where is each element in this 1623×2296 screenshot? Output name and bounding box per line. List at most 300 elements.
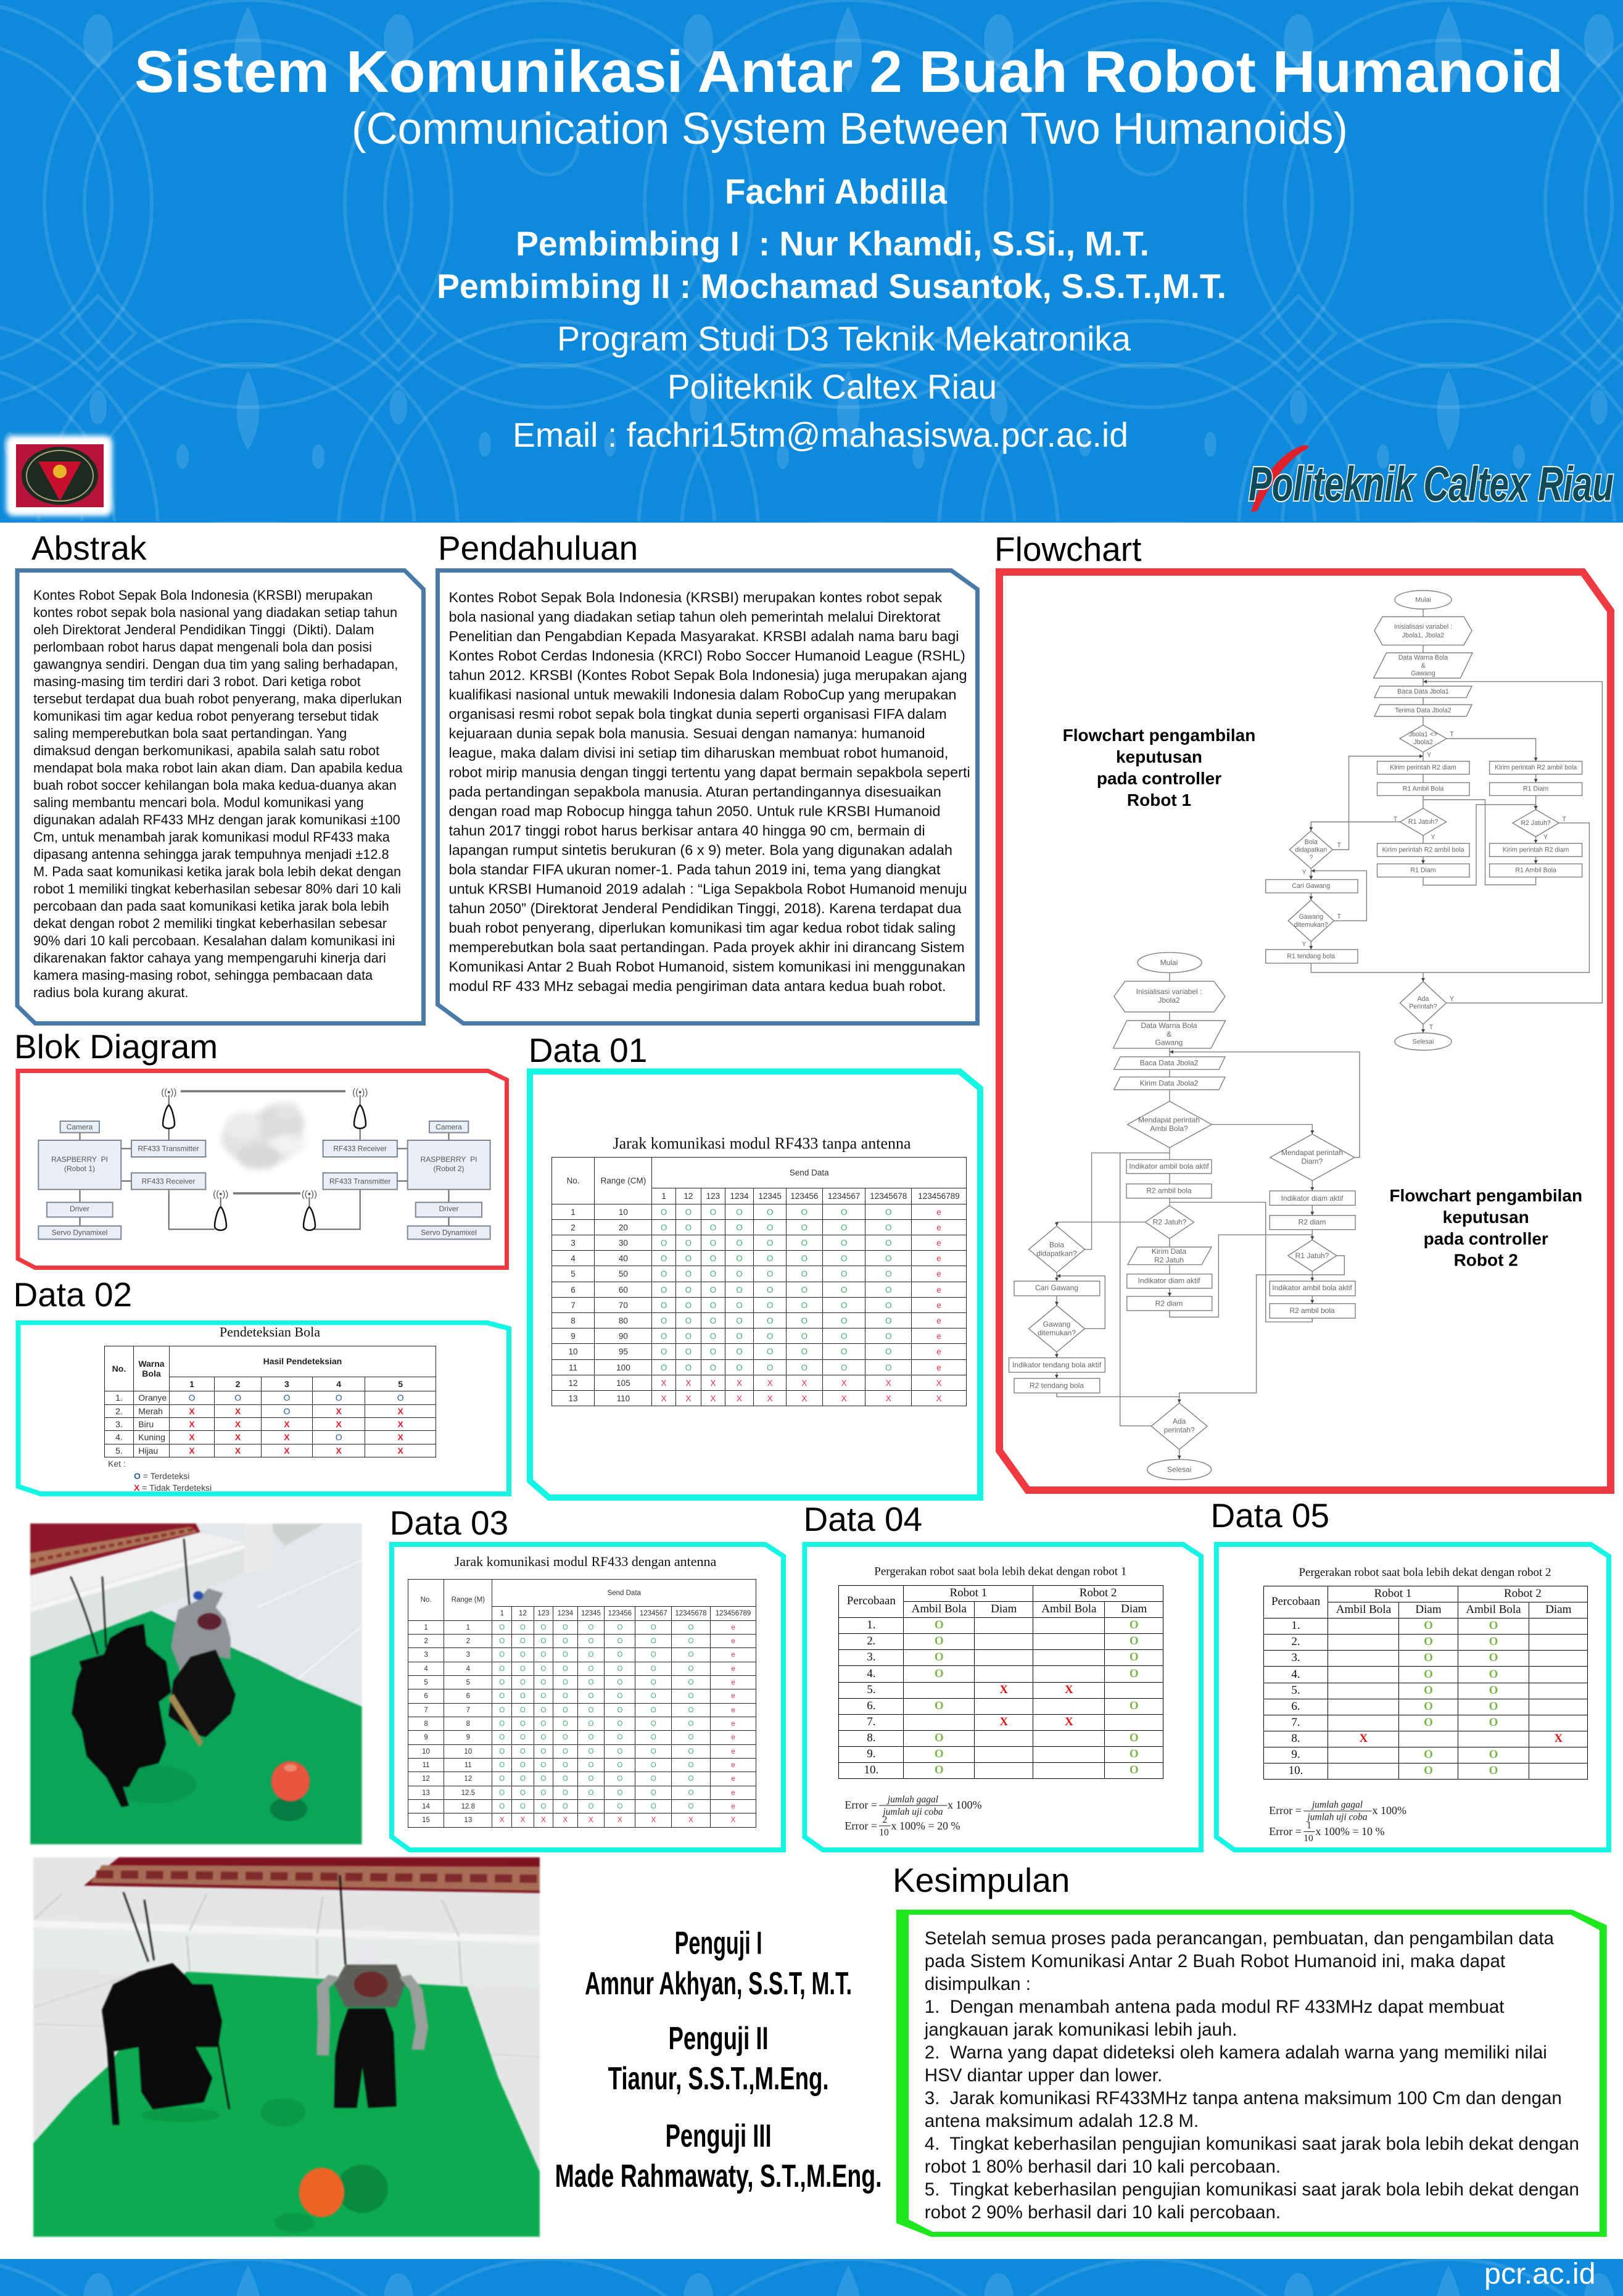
table: robot movement, ball closer to robot 1: O: [1129, 1747, 1139, 1760]
flowchart: Robot 2 decision: Baca Data Jbola2: [1140, 1058, 1199, 1067]
panel: Data 04: [802, 1542, 1204, 1852]
table: range with antenna: O: [499, 1720, 505, 1728]
table: range without antenna: O: [767, 1316, 773, 1325]
abstract text: perlombaan robot harus dapat mengenali bola dan posisi: [33, 639, 372, 655]
table: range without antenna: O: [661, 1207, 667, 1217]
flowchart: Robot 2 decision: Indikator diam aktif: [1138, 1277, 1200, 1285]
table: range without antenna: 105: [616, 1378, 630, 1387]
table: range without antenna: 3: [571, 1238, 576, 1248]
table: range with antenna: O: [588, 1679, 593, 1686]
error formula: [1269, 1799, 1406, 1844]
flowchart: Robot 1 decision: Y: [1302, 869, 1307, 876]
table: robot movement, ball closer to robot 1: 5.: [867, 1683, 875, 1696]
table: range without antenna: O: [685, 1285, 692, 1295]
flowchart: Robot 2 decision: R1 Jatuh?: [1295, 1251, 1329, 1260]
affiliation and email: [513, 319, 1131, 454]
table: ball detection: 3.: [115, 1419, 123, 1429]
examiners: Penguji III: [666, 2118, 772, 2154]
heading: Kesimpulan: Kesimpulan: [893, 1861, 1070, 1899]
error formula: jumlah gagal: [886, 1794, 938, 1805]
table: range with antenna: e: [731, 1748, 735, 1755]
table: range with antenna: e: [731, 1803, 735, 1810]
table: range with antenna: O: [651, 1679, 656, 1686]
table: range with antenna: O: [499, 1803, 505, 1810]
abstract text: Kontes Robot Sepak Bola Indonesia (KRSBI) merupakan: [33, 587, 373, 603]
flowchart: Robot 1 decision: R1 Ambil Bola: [1403, 785, 1443, 792]
footer banner: [0, 2259, 1623, 2296]
table: range with antenna: O: [540, 1789, 546, 1797]
abstract text: dekat dengan robot 2 memiliki tingkat keberhasilan sebesar: [33, 916, 387, 931]
table: range without antenna: O: [710, 1238, 716, 1248]
table: range with antenna: X: [521, 1817, 525, 1824]
flowchart: Robot 1 decision: T: [1337, 842, 1341, 849]
table: range without antenna: 6: [571, 1285, 576, 1295]
table: range without antenna: O: [685, 1362, 692, 1372]
flowchart: Robot 1 decision: Y: [1427, 752, 1431, 759]
heading: Data 04: Data 04: [803, 1500, 922, 1538]
table: range with antenna: O: [651, 1789, 656, 1797]
flowchart: Robot 2 decision: R2 diam: [1299, 1218, 1326, 1227]
abstract text: dipasang antenna sehingga jarak tempuhnya menjadi ±12.8: [33, 847, 389, 862]
title: Sistem Komunikasi Antar 2 Buah Robot Humanoid: [134, 39, 1563, 105]
table: range with antenna: X: [500, 1817, 505, 1824]
table: range with antenna: X: [617, 1817, 622, 1824]
table: range with antenna: 12345678: [675, 1610, 707, 1617]
table: range with antenna: O: [499, 1707, 505, 1714]
table: range without antenna: X: [737, 1393, 742, 1403]
table: robot movement, ball closer to robot 2: O: [1489, 1668, 1498, 1681]
table: ball detection: X: [284, 1432, 290, 1442]
table: range with antenna: O: [540, 1679, 546, 1686]
flowchart: Robot 1 decision: R1 Jatuh?: [1408, 818, 1438, 826]
affiliation and email: Politeknik Caltex Riau: [667, 367, 997, 406]
table: ball detection: O: [397, 1393, 404, 1403]
table: range with antenna: O: [520, 1651, 526, 1659]
abstract text: komunikasi tim agar kedua robot penyerang tersebut tidak: [33, 708, 379, 724]
table: range with antenna: O: [520, 1638, 526, 1645]
flowchart: Robot 2 decision: R2 ambil bola: [1289, 1306, 1335, 1315]
table: range without antenna: 8: [571, 1316, 576, 1325]
antenna wave symbols: ((•)): [213, 1189, 228, 1200]
abstract text: kamera masing-masing robot, sehingga pembacaan data: [33, 968, 373, 983]
table: range with antenna: O: [617, 1651, 622, 1659]
table: robot movement, ball closer to robot 1: O: [1129, 1699, 1139, 1712]
table: robot movement, ball closer to robot 1: Percobaan: [847, 1594, 896, 1607]
examiners: [555, 1925, 882, 2194]
table: range with antenna: O: [520, 1693, 526, 1700]
table: range without antenna: O: [710, 1347, 716, 1356]
table: range with antenna: 4: [466, 1665, 470, 1673]
caption: Robot 2 flowchart: keputusan: [1443, 1208, 1529, 1227]
table: range without antenna: O: [841, 1316, 847, 1325]
table: range with antenna: 6: [424, 1693, 428, 1700]
table: range with antenna: e: [731, 1762, 735, 1769]
introduction text: memperebutkan bola saat pertandingan. Pada proyek akhir ini dirancang Sistem: [449, 939, 965, 955]
table: range without antenna: O: [685, 1301, 692, 1309]
table: robot movement, ball closer to robot 1: Robot 2: [1080, 1586, 1117, 1599]
flowchart: Robot 2 decision: Indikator tendang bola aktif: [1012, 1361, 1102, 1369]
table: range without antenna: O: [767, 1269, 773, 1279]
table: range without antenna: 12: [683, 1192, 693, 1201]
introduction text: tahun 2017 tinggi robot harus berkisar antara 40 hingga 90 cm, bermain di: [449, 823, 925, 839]
table: range with antenna: O: [563, 1624, 568, 1631]
flowchart: Robot 1 decision: Y: [1431, 834, 1435, 841]
flowchart: Robot 1 decision: Bola: [1305, 839, 1318, 846]
flowchart: Robot 1 decision: T: [1394, 816, 1398, 823]
flowchart: Robot 1 decision: didapatkan: [1295, 847, 1327, 854]
table: range with antenna: 12.8: [461, 1803, 475, 1810]
table: range without antenna: O: [661, 1301, 667, 1309]
table: range with antenna: O: [617, 1638, 622, 1645]
table: range without antenna: O: [661, 1269, 667, 1279]
table: range without antenna: O: [801, 1316, 807, 1325]
table: ball detection: 4.: [115, 1432, 123, 1442]
table: range without antenna: X: [661, 1378, 667, 1387]
table: robot movement, ball closer to robot 2: 4.: [1291, 1668, 1300, 1681]
table: range without antenna: 123: [706, 1192, 720, 1201]
table: range without antenna: O: [841, 1207, 847, 1217]
table: range with antenna: O: [563, 1679, 568, 1686]
table: range without antenna: O: [841, 1332, 847, 1340]
table: range with antenna: O: [520, 1679, 526, 1686]
table: range without antenna: O: [710, 1285, 716, 1295]
table: range without antenna: 123456: [790, 1192, 818, 1201]
table: range without antenna: O: [661, 1362, 667, 1372]
table: range with antenna: O: [688, 1651, 693, 1659]
table: robot movement, ball closer to robot 2: 3.: [1291, 1651, 1300, 1664]
table: range with antenna: O: [617, 1679, 622, 1686]
table: robot movement, ball closer to robot 1: O: [1129, 1635, 1139, 1647]
table: range with antenna: O: [617, 1624, 622, 1631]
conclusion text: robot 1 80% berhasil dari 10 kali percobaan.: [925, 2157, 1281, 2177]
caption: Robot 1 flowchart: keputusan: [1116, 747, 1202, 766]
table: robot movement, ball closer to robot 2: O: [1424, 1635, 1433, 1648]
block diagram connectors: [80, 1095, 449, 1229]
table: range without antenna: X: [936, 1393, 942, 1403]
antenna wave symbols: ((•)): [302, 1189, 317, 1200]
table: range without antenna: O: [736, 1254, 743, 1262]
table: ball detection: X: [189, 1446, 195, 1456]
flowchart: Robot 2 decision: Ada: [1173, 1417, 1186, 1426]
Robot 2 blocks: RF433 Transmitter: [329, 1177, 390, 1186]
table: range without antenna: e: [936, 1207, 941, 1217]
Robot 2 blocks: [323, 1121, 490, 1239]
Robot 1 blocks: Driver: [70, 1204, 89, 1213]
table: range with antenna: O: [617, 1693, 622, 1700]
table: range with antenna: O: [499, 1638, 505, 1645]
table: range without antenna: X: [767, 1378, 773, 1387]
table: range with antenna: O: [563, 1638, 568, 1645]
error formula: 1: [1307, 1820, 1311, 1831]
table: range without antenna: O: [767, 1347, 773, 1356]
table: range without antenna: O: [736, 1316, 743, 1325]
table: range without antenna: O: [685, 1254, 692, 1262]
table: range with antenna: 9: [424, 1734, 428, 1741]
Robot 1 blocks: Servo Dynamixel: [52, 1228, 107, 1237]
table: range without antenna: O: [801, 1269, 807, 1279]
abstract text: 90% dari 10 kali percobaan. Kesalahan dalam komunikasi ini: [33, 933, 395, 948]
flowchart: Robot 1 decision: Gawang: [1411, 670, 1435, 678]
table: robot movement, ball closer to robot 2: [1263, 1586, 1588, 1780]
flowchart: Robot 1 decision: Data Warna Bola: [1398, 654, 1448, 661]
table: robot movement, ball closer to robot 2: O: [1424, 1684, 1433, 1697]
table: range without antenna: 9: [571, 1332, 576, 1340]
table: range without antenna: X: [661, 1393, 667, 1403]
table: range with antenna: 10: [464, 1748, 472, 1755]
table: ball detection: Biru: [138, 1419, 154, 1429]
table: robot movement, ball closer to robot 1: 1.: [867, 1618, 875, 1631]
table: range without antenna: O: [736, 1347, 743, 1356]
table: robot movement, ball closer to robot 2: O: [1424, 1619, 1433, 1632]
table: robot movement, ball closer to robot 2: 2.: [1291, 1635, 1300, 1648]
flowchart: Robot 2 decision: Indikator ambil bola aktif: [1272, 1283, 1352, 1292]
table: robot movement, ball closer to robot 1: Diam: [1121, 1602, 1147, 1615]
abstract text: buah robot soccer kehilangan bola maka kedua-duanya akan: [33, 777, 397, 793]
flowchart: Robot 2 decision: R2 diam: [1155, 1299, 1183, 1308]
table: robot movement, ball closer to robot 1: X: [1065, 1683, 1073, 1696]
table: ball detection: Oranye: [138, 1393, 167, 1403]
table: range with antenna: O: [540, 1734, 546, 1741]
table: range with antenna: 6: [466, 1693, 470, 1700]
supervisors: [437, 224, 1226, 305]
table: ball detection: Hasil Pendeteksian: [263, 1356, 342, 1366]
table: range with antenna: O: [588, 1803, 593, 1810]
flowchart: Robot 2 decision: Diam?: [1302, 1157, 1323, 1166]
table: range without antenna: 11: [569, 1362, 577, 1372]
flowchart: Robot 1 decision: T: [1429, 1024, 1434, 1031]
flowchart: Robot 1 decision: Jbola1 <>: [1409, 731, 1437, 738]
table: range with antenna: O: [520, 1734, 526, 1741]
flowchart: Robot 1 decision: Gawang: [1299, 913, 1323, 921]
error formula: Error =: [1269, 1825, 1302, 1838]
table: range without antenna: O: [736, 1269, 743, 1279]
abstract text: dikarenakan faktor cahaya yang mempengaruhi kinerja dari: [33, 950, 386, 966]
table: ball detection: X: [235, 1419, 241, 1429]
table: range with antenna: O: [520, 1803, 526, 1810]
table: range with antenna: O: [688, 1775, 693, 1783]
table: robot movement, ball closer to robot 2: O: [1424, 1700, 1433, 1713]
heading: Blok Diagram: Blok Diagram: [14, 1027, 218, 1066]
flowchart: Robot 2 decision: Mulai: [1160, 958, 1178, 967]
error formula: jumlah gagal: [1311, 1799, 1363, 1810]
conclusion text: 2. Warna yang dapat dideteksi oleh kamera adalah warna yang memiliki nilai: [925, 2042, 1547, 2063]
table: robot movement, ball closer to robot 1: O: [1129, 1651, 1139, 1664]
abstract text: masing-masing tim terdiri dari 3 robot. Dari ketiga robot: [33, 674, 361, 689]
table: ball detection: Kuning: [138, 1432, 165, 1442]
introduction text: untuk KRSBI Humanoid 2019 adalah : “Liga Sepakbola Robot Humanoid menuju: [449, 881, 967, 897]
table: range without antenna: 40: [619, 1254, 628, 1262]
panel: Abstrak: [15, 568, 426, 1026]
Robot 2 blocks: (Robot 2): [433, 1164, 465, 1173]
table: range with antenna: O: [540, 1693, 546, 1700]
table: ball detection: X: [235, 1446, 241, 1456]
table: robot movement, ball closer to robot 2: Ambil Bola: [1336, 1603, 1391, 1616]
table: range with antenna: No.: [421, 1596, 431, 1604]
table: range without antenna: O: [661, 1316, 667, 1325]
caption: Robot 1 flowchart: Robot 1: [1127, 790, 1191, 810]
table: range with antenna: O: [651, 1803, 656, 1810]
conclusion text: 1. Dengan menambah antena pada modul RF 433MHz dapat membuat: [925, 1997, 1504, 2017]
introduction text: dengan road map Robocup hingga tahun 2050. Untuk rule KRSBI Humanoid: [449, 803, 940, 819]
table: range with antenna: 13: [464, 1817, 472, 1824]
conclusion text: jangkauan jarak komunikasi lebih jauh.: [924, 2020, 1237, 2040]
introduction text: league, maka dalam divisi ini setiap tim diharuskan membuat robot humanoid,: [449, 745, 948, 761]
table: range without antenna: O: [885, 1223, 892, 1232]
table: range with antenna: O: [499, 1762, 505, 1769]
conclusion text: robot 2 90% berhasil dari 10 kali percobaan.: [925, 2202, 1281, 2223]
table title: Pendeteksian Bola: [220, 1324, 320, 1340]
table: range with antenna: O: [563, 1803, 568, 1810]
abstract text: oleh Direktorat Jenderal Pendidikan Tinggi (Dikti). Dalam: [33, 622, 374, 637]
table: range without antenna: O: [801, 1207, 807, 1217]
table: robot movement, ball closer to robot 1: 2.: [867, 1635, 875, 1647]
table: range with antenna: 11: [465, 1762, 472, 1769]
flowchart: Robot 2 decision: Ambi Bola?: [1150, 1124, 1188, 1133]
table: robot movement, ball closer to robot 2: Robot 1: [1374, 1587, 1411, 1600]
table: range without antenna: 1234567: [828, 1192, 860, 1201]
table: range with antenna: O: [588, 1651, 593, 1659]
table: range without antenna: 12: [568, 1378, 577, 1387]
error formula: jumlah uji coba: [1306, 1812, 1368, 1823]
table: range with antenna: e: [731, 1651, 735, 1659]
table: range without antenna: Send Data: [790, 1168, 829, 1177]
heading: Data 03: Data 03: [390, 1504, 508, 1542]
table: ball detection: X: [398, 1432, 403, 1442]
antennas: [163, 1105, 366, 1230]
table: range with antenna: 1: [500, 1610, 504, 1617]
table: range without antenna: e: [936, 1332, 941, 1340]
table: range without antenna: O: [661, 1332, 667, 1340]
table: range with antenna: O: [520, 1720, 526, 1728]
table: range with antenna: 9: [466, 1734, 470, 1741]
table: robot movement, ball closer to robot 1: 6.: [867, 1699, 875, 1712]
table: range with antenna: O: [688, 1734, 693, 1741]
flowchart: Robot 1 decision: R1 Ambil Bola: [1515, 867, 1556, 874]
flowchart: Robot 1 decision: Kirim perintah R2 diam: [1390, 764, 1456, 771]
table: range with antenna: O: [499, 1651, 505, 1659]
table: range with antenna: X: [588, 1817, 593, 1824]
flowchart: Robot 2 decision: Cari Gawang: [1035, 1283, 1078, 1292]
table: range with antenna: O: [540, 1638, 546, 1645]
table: range with antenna: O: [520, 1707, 526, 1714]
table: range without antenna: 30: [619, 1238, 628, 1248]
table: ball detection: Warna: [138, 1359, 165, 1369]
table: range without antenna: X: [685, 1378, 691, 1387]
flowchart: Robot 1 decision: Y: [1450, 995, 1454, 1003]
table: range without antenna: O: [710, 1316, 716, 1325]
table: range without antenna: O: [841, 1269, 847, 1279]
table: range with antenna: O: [588, 1789, 593, 1797]
table: robot movement, ball closer to robot 1: O: [935, 1731, 944, 1744]
flowchart: Robot 2 decision: ditemukan?: [1038, 1328, 1076, 1337]
table: range without antenna: O: [885, 1285, 892, 1295]
table: range without antenna: X: [710, 1378, 716, 1387]
affiliation and email: Program Studi D3 Teknik Mekatronika: [557, 319, 1131, 358]
flowchart: Robot 1 decision: R1 Diam: [1410, 867, 1436, 874]
table: robot movement, ball closer to robot 1: 10.: [864, 1763, 878, 1776]
table: range with antenna: O: [540, 1665, 546, 1673]
table: range without antenna: 20: [619, 1223, 628, 1232]
flowchart: Robot 1 decision: Mulai: [1415, 596, 1431, 603]
table: ball detection: O: [284, 1406, 290, 1416]
table: range with antenna: O: [651, 1638, 656, 1645]
table: range with antenna: 3: [466, 1651, 470, 1659]
flowchart: Robot 2 decision: Inisialisasi variabel :: [1136, 987, 1202, 996]
table: robot movement, ball closer to robot 1: O: [935, 1635, 944, 1647]
table: range without antenna: X: [767, 1393, 773, 1403]
table: range with antenna: O: [588, 1762, 593, 1769]
table: range without antenna: O: [841, 1362, 847, 1372]
table: range without antenna: e: [936, 1269, 941, 1279]
heading: Pendahuluan: Pendahuluan: [438, 529, 638, 567]
table: range with antenna: 4: [424, 1665, 428, 1673]
table: range with antenna: 15: [422, 1817, 430, 1824]
panel: Blok Diagram: [16, 1069, 509, 1270]
table: range without antenna: 123456789: [918, 1192, 960, 1201]
abstract text: gawangnya sendiri. Dengan dua tim yang saling berhadapan,: [33, 657, 398, 672]
table: range without antenna: No.: [566, 1176, 580, 1185]
Robot 1 blocks: Camera: [67, 1123, 93, 1132]
table: ball detection: X: [398, 1419, 403, 1429]
table: range with antenna: O: [588, 1734, 593, 1741]
table: range without antenna: O: [801, 1238, 807, 1248]
introduction text: kualifikasi nasional untuk mewakili Indonesia dalam RoboCup yang merupakan: [449, 686, 956, 702]
table: robot movement, ball closer to robot 2: 7.: [1291, 1716, 1300, 1729]
table: range with antenna: 1234: [558, 1610, 573, 1617]
table: range with antenna: 12: [422, 1775, 430, 1783]
table: range with antenna: O: [617, 1762, 622, 1769]
table: range without antenna: e: [936, 1316, 941, 1325]
flowchart: Robot 1 decision: Y: [1543, 834, 1548, 841]
table: range with antenna: O: [520, 1789, 526, 1797]
table: range with antenna: O: [499, 1734, 505, 1741]
flowchart: Robot 2 decision: [1009, 953, 1360, 1480]
table: robot movement, ball closer to robot 2: 9.: [1291, 1748, 1300, 1761]
flowchart: Robot 2 decision: R2 tendang bola: [1030, 1381, 1084, 1390]
examiners: Penguji I: [675, 1925, 762, 1961]
table: robot movement, ball closer to robot 2: O: [1424, 1716, 1433, 1729]
table: range with antenna: 8: [466, 1720, 470, 1728]
table: range with antenna: O: [520, 1748, 526, 1755]
wireless links: [181, 1091, 345, 1193]
flowchart: Robot 1 decision: Terima Data Jbola2: [1395, 707, 1452, 715]
flowchart: Robot 2 decision: Gawang: [1043, 1320, 1070, 1328]
flowchart: Robot 1 decision: R1 Diam: [1523, 785, 1548, 792]
table: range without antenna: e: [936, 1223, 941, 1232]
table: range without antenna: 110: [617, 1393, 630, 1403]
table: range without antenna: X: [841, 1378, 847, 1387]
table: range without antenna: O: [710, 1223, 716, 1232]
table: robot movement, ball closer to robot 1: Diam: [991, 1602, 1017, 1615]
table: ball detection: 5: [398, 1379, 403, 1389]
table: range without antenna: O: [885, 1301, 892, 1309]
table: range with antenna: X: [563, 1817, 568, 1824]
table: range without antenna: O: [685, 1238, 692, 1248]
table: robot movement, ball closer to robot 2: 8.: [1291, 1732, 1300, 1745]
table: range without antenna: 1234: [730, 1192, 749, 1201]
table: range without antenna: O: [767, 1223, 773, 1232]
flowchart: Robot 1 decision: Cari Gawang: [1292, 882, 1330, 890]
abstract text: tersebut terdapat dua buah robot penyerang, maka diperlukan: [33, 691, 402, 707]
table: range without antenna: 10: [568, 1347, 577, 1356]
table: robot movement, ball closer to robot 1: 7.: [867, 1715, 875, 1728]
table: range with antenna: e: [731, 1624, 735, 1631]
table: range with antenna: e: [731, 1734, 735, 1741]
table title: Jarak komunikasi modul RF433 tanpa antenna: [613, 1134, 911, 1152]
table: range without antenna: O: [736, 1362, 743, 1372]
table: ball detection: 2.: [115, 1406, 123, 1416]
caption: Robot 1 flowchart: [1063, 726, 1255, 810]
